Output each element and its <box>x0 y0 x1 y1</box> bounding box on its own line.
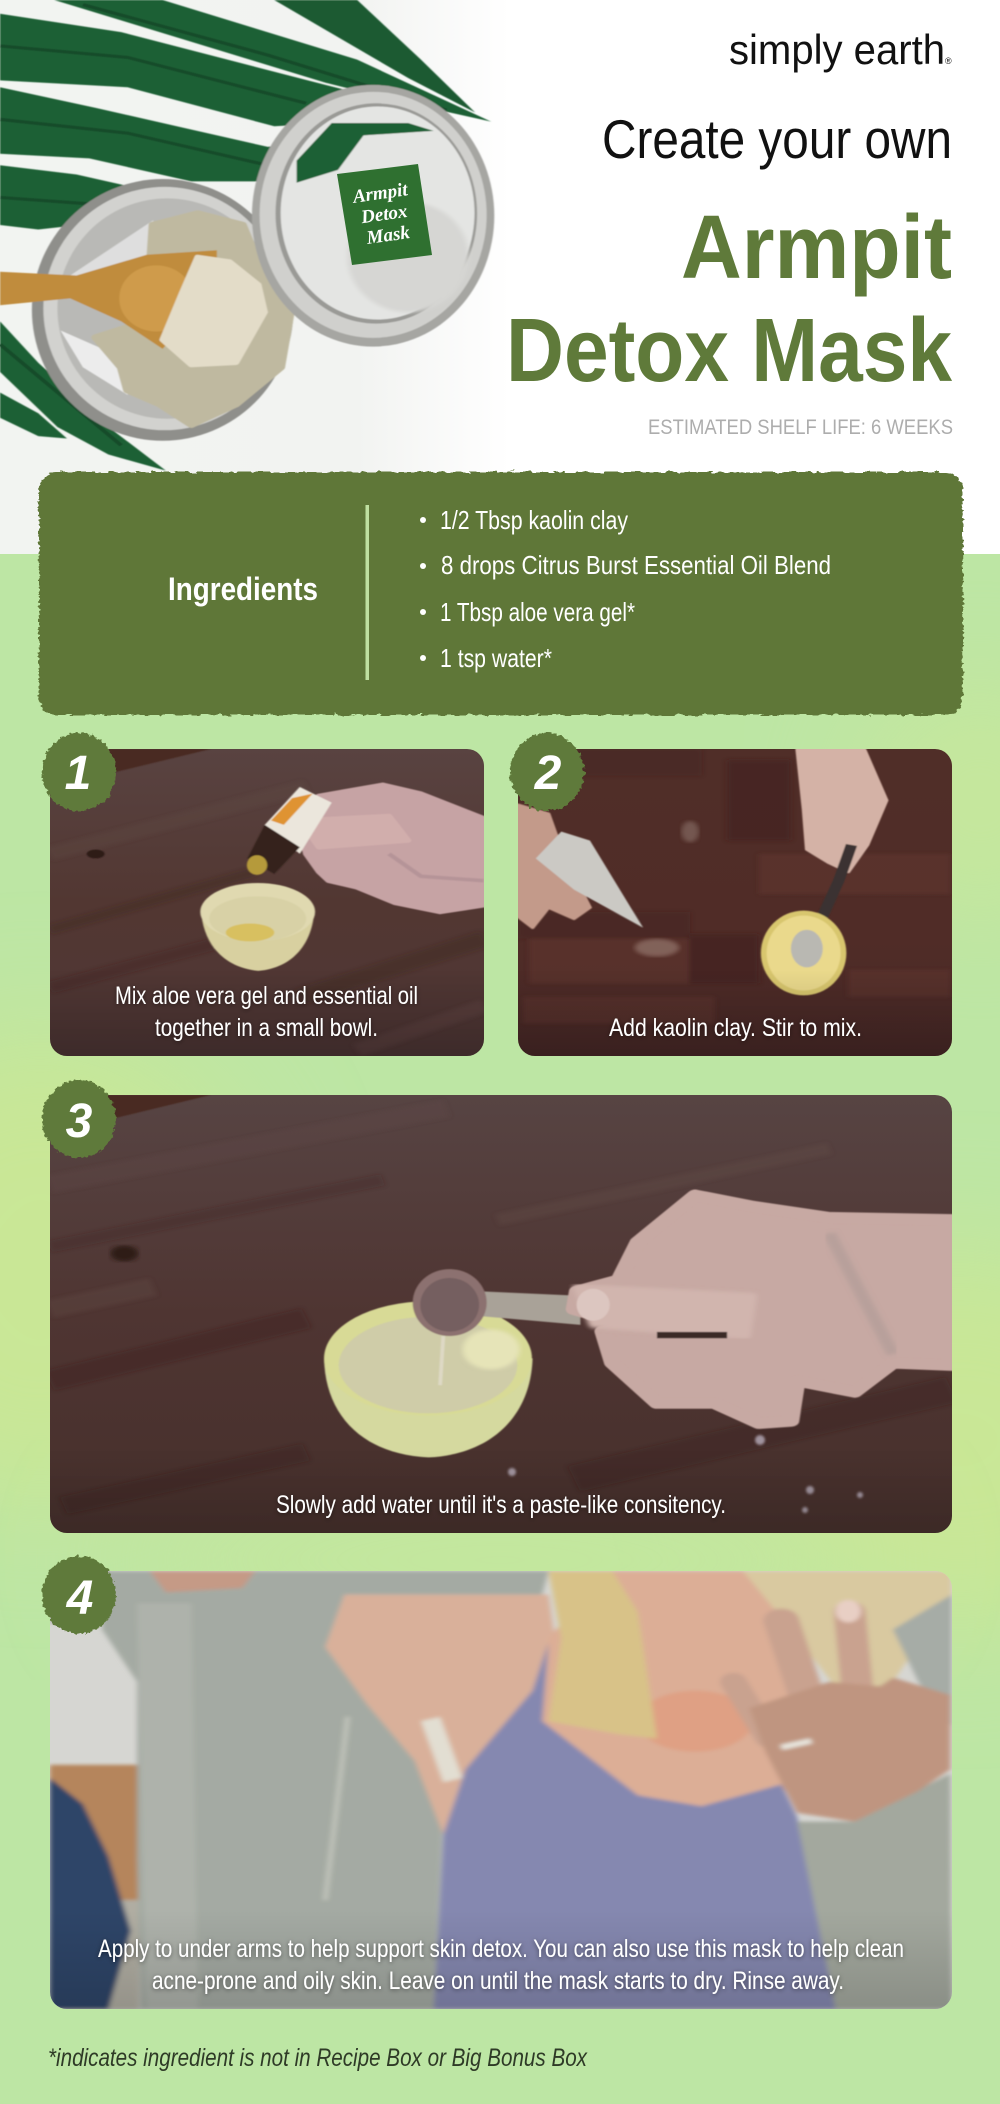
shelf life: ESTIMATED SHELF LIFE: 6 WEEKS <box>648 416 953 439</box>
badge: step 4: 4 <box>66 1572 93 1625</box>
water stream <box>440 1336 443 1385</box>
ingredients list: 1 Tbsp aloe vera gel* <box>440 597 635 627</box>
photo: bottle over bowl <box>50 749 485 1056</box>
tank top <box>434 1643 836 2009</box>
panel: step 4 <box>50 1571 952 2009</box>
yellow bowl <box>761 911 846 995</box>
right sleeve <box>893 1595 952 1726</box>
product label on lid: Detox <box>359 201 409 228</box>
panel: step 3 <box>50 1095 952 1533</box>
ingredients list: 1/2 Tbsp kaolin clay <box>440 505 628 535</box>
footnote: *indicates ingredient is not in Recipe Box or Big Bonus Box <box>48 2044 588 2072</box>
badge: step 3 <box>42 1080 116 1158</box>
caption step 1 <box>115 982 418 1042</box>
divider <box>366 505 369 680</box>
spoon <box>816 845 851 930</box>
caption step 1: together in a small bowl. <box>155 1014 378 1042</box>
bag and left hand <box>518 805 590 928</box>
hand <box>733 1612 861 1739</box>
spoon <box>0 250 217 349</box>
lid <box>252 85 494 347</box>
chest and neck <box>529 1571 829 1813</box>
leaves <box>0 0 491 471</box>
badge: step 2 <box>510 733 584 811</box>
bottle <box>265 787 332 854</box>
spoon <box>478 1291 580 1325</box>
tin <box>32 179 293 441</box>
paste <box>96 213 290 425</box>
product label on lid: Mask <box>364 222 412 249</box>
right hand <box>797 749 887 872</box>
clay <box>163 257 265 365</box>
product label on lid: Armpit <box>351 179 410 208</box>
badge: step 1: 1 <box>65 747 91 800</box>
title line 2: Armpit <box>681 198 952 298</box>
title line 1: Create your own <box>602 108 952 170</box>
panel: ingredients <box>39 472 963 715</box>
badge: step 2: 2 <box>534 747 562 800</box>
hair <box>549 1571 657 1739</box>
photo: adding clay <box>518 749 952 1056</box>
badge: step 3: 3 <box>66 1095 93 1148</box>
bowl <box>201 918 314 972</box>
page background <box>0 554 1000 2104</box>
title line 3: Detox Mask <box>506 301 953 401</box>
hand <box>300 785 483 912</box>
caption step 3: Slowly add water until it's a paste-like consitency. <box>276 1491 726 1519</box>
ingredients list <box>420 505 831 673</box>
mask streak <box>421 1717 462 1782</box>
ingredients list: 8 drops Citrus Burst Essential Oil Blend <box>441 550 831 580</box>
caption step 4 <box>98 1935 904 1995</box>
photo: adding water <box>50 1095 952 1533</box>
cardigan left <box>102 1571 549 2009</box>
skin <box>325 1595 555 1835</box>
badge: step 4 <box>42 1556 116 1634</box>
bowl <box>324 1358 533 1457</box>
photo: applying mask <box>50 1571 952 2009</box>
panel: step 2 <box>518 749 952 1056</box>
ingredients heading: Ingredients <box>168 571 318 607</box>
logo: simply earth <box>729 26 945 73</box>
caption step 4: acne-prone and oily skin. Leave on until the mask starts to dry. Rinse away. <box>152 1967 844 1995</box>
ingredients list: 1 tsp water* <box>440 643 552 673</box>
logo registered mark: ® <box>945 56 952 66</box>
caption step 2: Add kaolin clay. Stir to mix. <box>609 1014 862 1042</box>
caption step 1: Mix aloe vera gel and essential oil <box>115 982 418 1010</box>
hand <box>574 1195 952 1423</box>
panel: step 1 <box>50 749 485 1056</box>
specks <box>508 1435 863 1513</box>
product label on lid <box>337 164 432 265</box>
badge: step 1 <box>42 733 116 811</box>
header photo: leaves, tin and lid <box>0 0 510 554</box>
